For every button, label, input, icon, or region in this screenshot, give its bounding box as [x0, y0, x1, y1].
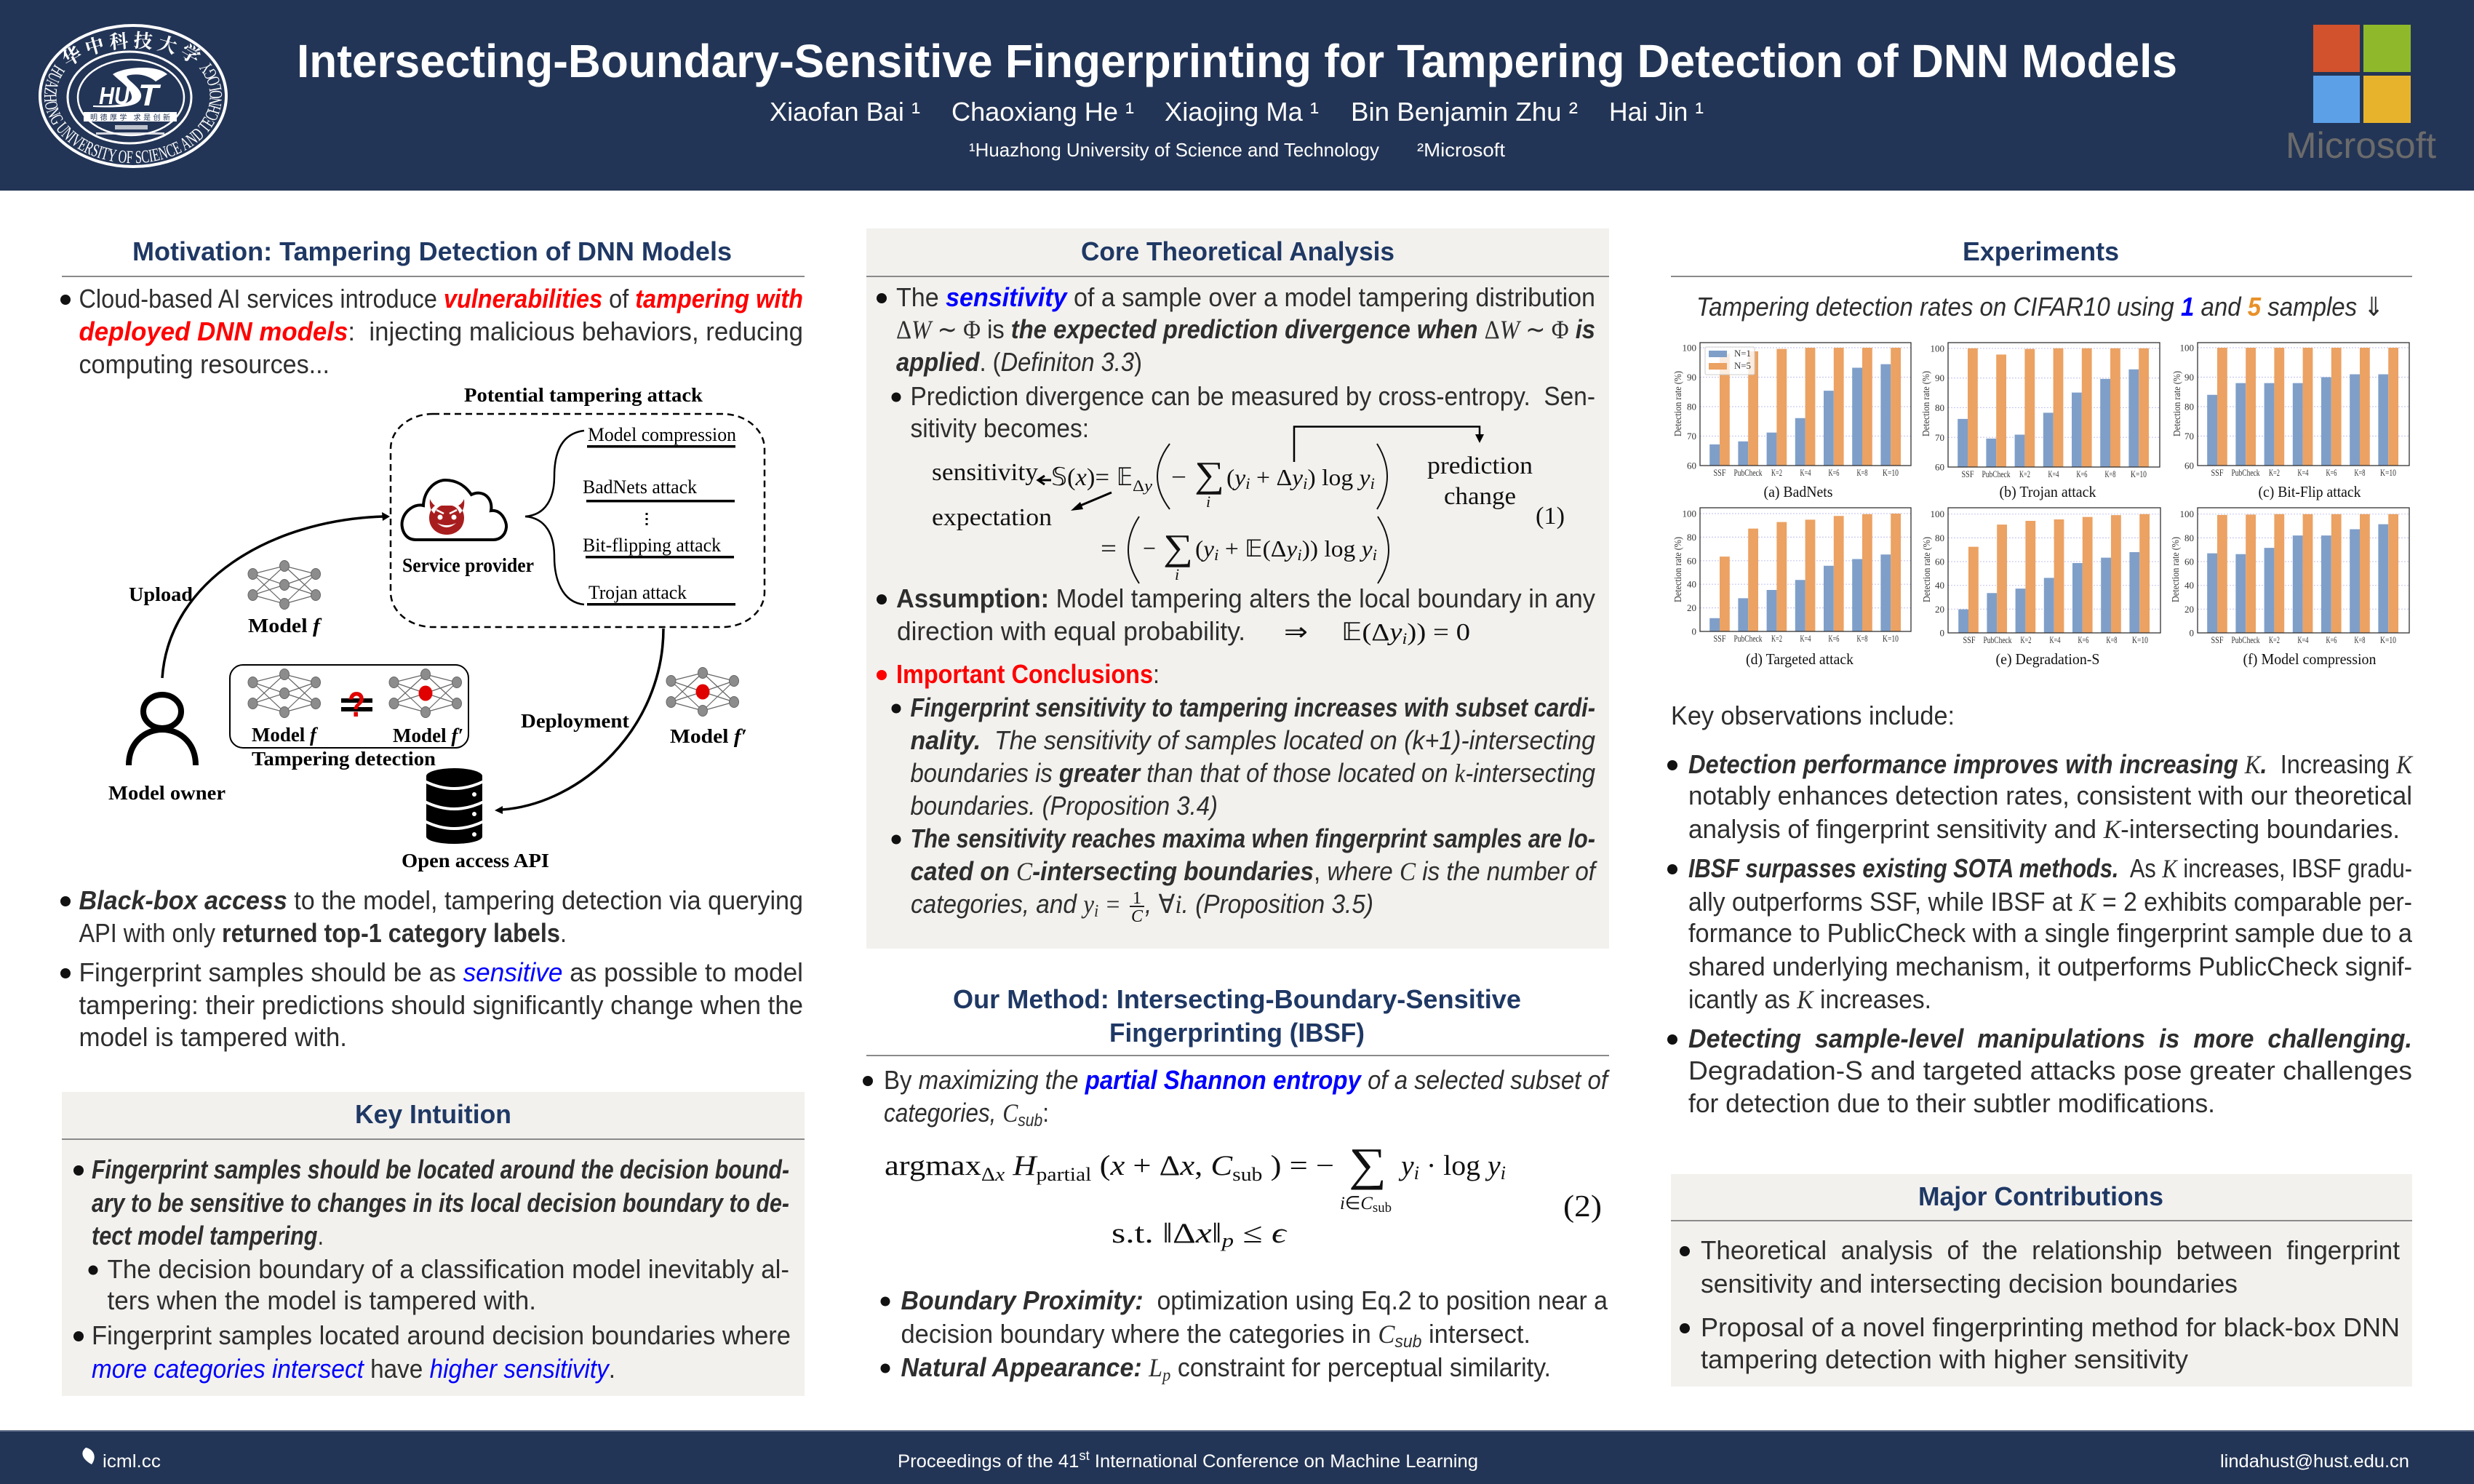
- equation 1: i: [1245, 474, 1250, 492]
- header banner: [0, 0, 2474, 191]
- icon: not equal question: ?: [348, 686, 365, 725]
- text block: key observations: ally outperforms SSF, while IBSF at K = 2 exhibits comparable per-: [1688, 887, 2412, 917]
- equation 1: i: [1214, 546, 1218, 564]
- bar chart: Model compression: [2171, 508, 2409, 668]
- equation 1: 𝔼: [1117, 464, 1133, 491]
- heading: our method: Fingerprinting (IBSF): [1109, 1018, 1365, 1048]
- text block: method details: Natural Appearance: L: [901, 1352, 1163, 1382]
- footer: email: lindahust@hust.edu.cn: [2220, 1451, 2409, 1472]
- equation 1: i: [1370, 474, 1375, 492]
- equation 1: −: [1171, 464, 1186, 491]
- icon: university logo: HU: [99, 82, 130, 109]
- bar chart: Degradation-S: 100: [1931, 508, 1944, 519]
- text block: key observations: analysis of fingerprint sensitivity and K-intersecting boundaries.: [1688, 814, 2400, 844]
- bar chart: Trojan attack: 60: [1935, 461, 1944, 473]
- equation 1: i: [1206, 492, 1210, 511]
- icon: tampered network f': [666, 668, 739, 716]
- equation 2: argmax: [885, 1150, 969, 1181]
- text block: contribution 1: Theoretical analysis of the relationship between fingerprint: [1701, 1235, 2400, 1265]
- bar chart: Model compression: 20: [2184, 604, 2194, 615]
- equation 1: −: [1143, 535, 1156, 562]
- diagram: tampering workflow: Tampering detection: [252, 748, 436, 770]
- authors: [770, 97, 1704, 127]
- text block: key observations: shared underlying mechanism, it outperforms PublicCheck signif-: [1688, 952, 2412, 981]
- bar chart: Targeted attack: 40: [1687, 579, 1696, 590]
- equation 1: y: [1284, 535, 1298, 562]
- equation 2: sub: [1232, 1164, 1262, 1185]
- bar chart: Targeted attack: K=6: [1829, 633, 1840, 644]
- bar chart: Degradation-S: 20: [1935, 604, 1944, 615]
- equation 2: [885, 1138, 1602, 1251]
- legend: [1705, 347, 1755, 375]
- bar chart: Degradation-S: K=10: [2132, 634, 2148, 645]
- text block: black-box access: API with only returned top-1 category labels.: [79, 918, 567, 948]
- text block: partial entropy: categories, C: [884, 1098, 1020, 1128]
- bar chart: Degradation-S: 0: [1939, 627, 1944, 639]
- equation 1: expectation: [932, 504, 1052, 531]
- bar chart: Bit-Flip attack: K=10: [2380, 467, 2396, 478]
- bar chart: Targeted attack: (d) Targeted attack: [1746, 650, 1853, 668]
- equation 1: + 𝔼(Δ: [1218, 535, 1286, 562]
- panel: core theoretical analysis: [866, 228, 1609, 949]
- equation 2: ≤: [1234, 1218, 1272, 1249]
- icon: cloud with devil: [402, 480, 506, 540]
- text block: method details: [880, 1285, 1608, 1385]
- icon: Microsoft logo: [2286, 25, 2436, 166]
- equation 2: i∈C: [1340, 1194, 1373, 1213]
- equation 2: s.t. ‖Δ x‖: [1112, 1218, 1220, 1249]
- bar chart: Trojan attack: 70: [1935, 432, 1944, 443]
- bar chart: Degradation-S: 60: [1935, 556, 1944, 567]
- bar chart: Degradation-S: K=8: [2107, 634, 2117, 645]
- text block: intersecting boundaries: Fingerprint samples located around decision boundaries where: [92, 1320, 791, 1350]
- tampering detection box: [230, 665, 468, 748]
- text block: assumption: 𝔼(Δy: [1341, 619, 1400, 646]
- bar chart: Bit-Flip attack: SSF: [2211, 467, 2223, 478]
- text block: important conclusions: C: [1131, 907, 1144, 926]
- chart subtitle: Tampering detection rates on CIFAR10 using 1 and 5 samples ⇓: [1696, 292, 2384, 322]
- icon: tampered network f' in box: [389, 669, 461, 717]
- text block: sensitive samples: [60, 957, 803, 1052]
- bar chart: Targeted attack: 80: [1687, 532, 1696, 543]
- text block: important conclusions: boundaries. (Proposition 3.4): [911, 791, 1218, 821]
- icon: network f: [248, 560, 320, 610]
- authors: Bin Benjamin Zhu ²: [1351, 97, 1578, 127]
- icon: Microsoft logo: Microsoft: [2286, 125, 2436, 166]
- bar chart: Trojan attack: K=6: [2076, 468, 2088, 479]
- text block: key observations: Detecting sample-level manipulations is more challenging.: [1688, 1024, 2412, 1053]
- text block: cloud services: Cloud-based AI services introduce vulnerabilities of tampering with: [79, 284, 803, 314]
- bar chart: Trojan attack: [1921, 343, 2160, 500]
- text block: key observations: Degradation-S and targeted attacks pose greater challenges: [1688, 1056, 2412, 1085]
- legend: N=5: [1734, 360, 1751, 371]
- equation 1: y: [1357, 464, 1370, 490]
- bar chart: BadNets: K=4: [1800, 467, 1811, 478]
- text block: sensitivity definition: ΔW ∼ Φ is the expected prediction divergence when ΔW ∼ Φ is: [896, 314, 1595, 344]
- equation 1: (y: [1195, 535, 1213, 562]
- footer: proceedings: Proceedings of the 41: [898, 1451, 1074, 1472]
- text block: assumption: direction with equal probability.: [897, 616, 1245, 646]
- equation 2: · log: [1419, 1150, 1488, 1181]
- bar chart: Degradation-S: 80: [1935, 532, 1944, 543]
- bar chart: Model compression: 0: [2190, 627, 2194, 639]
- bar chart: Degradation-S: Detection rate (%): [1922, 537, 1933, 602]
- bar chart: Trojan attack: (b) Trojan attack: [1999, 483, 2096, 500]
- equation 1: )) log: [1302, 535, 1362, 562]
- text block: key observations: formance to PublicCheck with a single fingerprint sample due to a: [1688, 918, 2413, 948]
- panel: our method: [863, 984, 1611, 1385]
- equation 2: partial: [1037, 1164, 1091, 1185]
- bar chart: Trojan attack: PubCheck: [1982, 468, 2011, 479]
- equation 1: ) log: [1308, 464, 1360, 490]
- bar chart: Model compression: SSF: [2211, 634, 2223, 645]
- bar chart: Degradation-S: SSF: [1963, 634, 1976, 645]
- diagram: tampering workflow: Open access API: [402, 850, 549, 871]
- affiliations: ²Microsoft: [1417, 139, 1506, 161]
- heading: our method: Our Method: Intersecting-Boundary-Sensitive: [953, 984, 1521, 1014]
- bar chart: Bit-Flip attack: [2172, 342, 2409, 500]
- text block: important conclusions: =: [1098, 890, 1121, 919]
- bar chart: Model compression: (f) Model compression: [2243, 650, 2377, 668]
- bar chart: Model compression: K=2: [2269, 634, 2280, 645]
- bar chart: BadNets: 60: [1687, 460, 1696, 471]
- panel: major contributions: [1671, 1174, 2412, 1387]
- bar chart: Targeted attack: 0: [1692, 626, 1696, 637]
- equation 1: (1): [1536, 503, 1565, 530]
- equation 2: Δ: [981, 1164, 995, 1185]
- equation 2: ) = −: [1262, 1150, 1334, 1181]
- bar chart: Degradation-S: K=2: [2021, 634, 2031, 645]
- text block: key observations: [1667, 701, 2414, 1118]
- text block: important conclusions: boundaries is greater than that of those located on k-intersecting: [911, 758, 1595, 788]
- text block: assumption: i: [1402, 629, 1407, 647]
- diagram: tampering workflow: Model compression: [588, 424, 736, 445]
- text block: partial entropy: By maximizing the partial Shannon entropy of a selected subset of: [884, 1065, 1611, 1095]
- text block: important conclusions: Fingerprint sensitivity to tampering increases with subset cardi-: [911, 693, 1595, 722]
- title: Intersecting-Boundary-Sensitive Fingerprinting for Tampering Detection of DNN Models: [297, 35, 2177, 87]
- text block: method details: decision boundary where the categories in C: [901, 1319, 1395, 1349]
- text block: fingerprint location: ary to be sensitive to changes in its local decision boundary to de-: [92, 1188, 789, 1218]
- icon: university logo: 明德厚学 求是创新: [90, 111, 170, 122]
- bar chart: Targeted attack: 100: [1682, 508, 1696, 519]
- footer: website: icml.cc: [103, 1451, 161, 1472]
- authors: Xiaofan Bai ¹: [770, 97, 920, 127]
- bar chart: BadNets: [1673, 342, 1911, 500]
- bar chart: Targeted attack: 60: [1687, 555, 1696, 566]
- text block: fingerprint location: The decision boundary of a classification model inevitably al-: [108, 1254, 789, 1284]
- equation 1: (y: [1226, 464, 1245, 490]
- text block: contribution 1: sensitivity and intersecting decision boundaries: [1701, 1269, 2238, 1298]
- bar chart: Trojan attack: Detection rate (%): [1921, 371, 1932, 436]
- text block: important conclusions: 1: [1133, 889, 1141, 908]
- bar chart: Targeted attack: PubCheck: [1734, 633, 1763, 644]
- bar chart: Bit-Flip attack: 70: [2184, 431, 2194, 442]
- bar chart: Bit-Flip attack: PubCheck: [2232, 467, 2260, 478]
- bar chart: BadNets: (a) BadNets: [1763, 483, 1833, 500]
- bar chart: Bit-Flip attack: 90: [2184, 372, 2194, 383]
- equation 2: (2): [1563, 1190, 1602, 1224]
- text block: sensitivity definition: applied. (Definiton 3.3): [896, 347, 1142, 377]
- bar chart: Targeted attack: Detection rate (%): [1673, 537, 1684, 602]
- icon: university logo: 华中科技大学: [63, 31, 201, 64]
- bar chart: Targeted attack: SSF: [1714, 633, 1725, 644]
- legend: N=1: [1734, 348, 1751, 359]
- tampering detection box: Model f: [252, 724, 319, 746]
- text block: key observations: for detection due to their subtler modifications.: [1688, 1088, 2215, 1118]
- panel: experiments: [1667, 236, 2414, 1118]
- bar chart: Model compression: 80: [2184, 532, 2194, 543]
- bar chart: Bit-Flip attack: K=8: [2354, 467, 2366, 478]
- text block: sensitive samples: model is tampered with.: [79, 1022, 347, 1052]
- tampering detection box: Model f′: [393, 725, 463, 746]
- equation 1: i: [1373, 546, 1377, 564]
- bar chart: BadNets: 100: [1682, 342, 1696, 354]
- authors: Chaoxiang He ¹: [951, 97, 1134, 127]
- text block: key observations: IBSF surpasses existing SOTA methods. As K increases, IBSF gradu-: [1688, 853, 2412, 883]
- text block: important conclusions: The sensitivity reaches maxima when fingerprint samples are lo-: [911, 823, 1595, 853]
- bar chart: Model compression: K=8: [2354, 634, 2366, 645]
- bar chart: BadNets: 70: [1687, 431, 1696, 442]
- text block: important conclusions: [877, 659, 1598, 926]
- panel: motivation: [60, 236, 805, 1052]
- text block: partial entropy: :: [1042, 1098, 1049, 1128]
- icon: database: [425, 768, 484, 844]
- text block: sensitivity definition: The sensitivity of a sample over a model tampering distribution: [896, 282, 1595, 312]
- diagram: tampering workflow: Upload: [129, 583, 193, 605]
- bar chart: Bit-Flip attack: 100: [2179, 342, 2194, 354]
- text block: partial entropy: sub: [1018, 1111, 1042, 1130]
- bar chart: Bit-Flip attack: 60: [2184, 460, 2194, 471]
- equation 2: H: [1012, 1150, 1038, 1181]
- bar chart: Bit-Flip attack: Detection rate (%): [2172, 371, 2183, 436]
- equation 2: i: [1414, 1162, 1419, 1184]
- bar chart: Trojan attack: K=2: [2019, 468, 2030, 479]
- bar chart: Degradation-S: (e) Degradation-S: [1996, 650, 2099, 668]
- bar chart: Model compression: 60: [2184, 556, 2194, 567]
- equation 1: i: [1175, 565, 1179, 583]
- bar chart: Trojan attack: SSF: [1961, 468, 1974, 479]
- authors: Xiaojing Ma ¹: [1165, 97, 1319, 127]
- bar chart: BadNets: PubCheck: [1734, 467, 1763, 478]
- icon: not equal question: [341, 686, 372, 725]
- text block: fingerprint location: tect model tampering.: [92, 1221, 324, 1250]
- text block: important conclusions: Important Conclusions:: [896, 659, 1160, 689]
- bar chart: Degradation-S: PubCheck: [1983, 634, 2012, 645]
- bar chart: BadNets: 80: [1687, 402, 1696, 412]
- text block: method details: intersect.: [1421, 1319, 1531, 1349]
- text block: key observations: Key observations include:: [1671, 701, 1955, 730]
- bar chart: Bit-Flip attack: 80: [2184, 402, 2194, 412]
- text block: assumption: [877, 583, 1595, 647]
- footer: proceedings: st: [1079, 1448, 1090, 1463]
- affiliations: ¹Huazhong University of Science and Technology: [969, 139, 1379, 161]
- diagram: tampering workflow: Model f: [248, 615, 322, 637]
- text block: method details: p: [1161, 1366, 1170, 1385]
- heading: key intuition: Key Intuition: [355, 1099, 511, 1129]
- text block: key observations: Detection performance improves with increasing K. Increasing K: [1688, 749, 2414, 779]
- text block: key observations: notably enhances detection rates, consistent with our theoretical: [1688, 781, 2412, 810]
- equation 1: i: [1303, 474, 1308, 492]
- diagram: tampering workflow: Service provider: [402, 554, 534, 576]
- text block: method details: sub: [1394, 1332, 1421, 1352]
- equation 1: y: [1290, 464, 1304, 490]
- bar chart: Targeted attack: [1673, 508, 1911, 668]
- authors: Hai Jin ¹: [1609, 97, 1704, 127]
- text block: contribution 2: Proposal of a novel fingerprinting method for black-box DNN: [1701, 1312, 2400, 1342]
- icon: university logo: T: [138, 78, 161, 112]
- bar chart: Trojan attack: K=4: [2048, 468, 2059, 479]
- bar chart: BadNets: K=8: [1856, 467, 1868, 478]
- bar chart: Targeted attack: K=10: [1883, 633, 1899, 644]
- text block: assumption: )) = 0: [1407, 619, 1470, 646]
- equation 2: sub: [1373, 1200, 1392, 1216]
- text block: intersecting boundaries: [73, 1320, 791, 1384]
- text block: sensitive samples: tampering: their predictions should significantly change when the: [79, 990, 803, 1020]
- bar chart: Trojan attack: 100: [1931, 343, 1944, 354]
- bar chart: Degradation-S: K=4: [2050, 634, 2061, 645]
- bar chart: BadNets: K=10: [1883, 467, 1899, 478]
- bar chart: BadNets: 90: [1687, 372, 1696, 383]
- heading: experiments: Experiments: [1963, 236, 2119, 266]
- text block: intersecting boundaries: more categories intersect have higher sensitivity.: [92, 1354, 615, 1384]
- text block: important conclusions: , ∀i. (Proposition 3.5): [1145, 889, 1373, 919]
- arrow: deployment: [495, 629, 663, 814]
- text block: important conclusions: cated on C-intersecting boundaries, where C is the number of: [911, 856, 1598, 886]
- bar chart: Bit-Flip attack: K=2: [2269, 467, 2280, 478]
- equation 2: y: [1485, 1150, 1501, 1181]
- icon: ICML mark: [82, 1448, 95, 1464]
- bar chart: Model compression: K=4: [2297, 634, 2309, 645]
- footer: proceedings: International Conference on Machine Learning: [1090, 1451, 1478, 1472]
- text block: sensitivity definition: Prediction divergence can be measured by cross-entropy. Sen-: [911, 381, 1595, 411]
- text block: cloud services: [60, 284, 803, 379]
- equation 1: i: [1297, 546, 1302, 564]
- bar chart: Trojan attack: 90: [1935, 372, 1944, 383]
- bar chart: Targeted attack: K=2: [1771, 633, 1782, 644]
- icon: university logo: HUAZHONG UNIVERSITY OF SCIENCE AND TECHNOLOGY: [44, 63, 223, 163]
- equation 1: + Δ: [1250, 464, 1292, 490]
- text block: cloud services: computing resources...: [79, 349, 330, 379]
- equation 1: sensitivity: [932, 459, 1038, 486]
- text block: sensitivity definition: sitivity becomes:: [911, 413, 1089, 443]
- text block: black-box access: [60, 885, 803, 948]
- equation 2: i: [1501, 1162, 1506, 1184]
- bar chart: Targeted attack: K=4: [1800, 633, 1811, 644]
- text block: fingerprint location: ters when the model is tampered with.: [108, 1285, 536, 1315]
- text block: contribution 2: [1680, 1312, 2400, 1374]
- equation 1: prediction: [1427, 452, 1533, 479]
- text block: important conclusions: nality. The sensitivity of samples located on (k+1)-intersecting: [911, 725, 1595, 755]
- diagram: tampering workflow: [108, 384, 765, 871]
- bar chart: BadNets: K=6: [1829, 467, 1840, 478]
- bar chart: Model compression: K=10: [2380, 634, 2396, 645]
- equation 2: x: [994, 1164, 1005, 1185]
- arrow: upload: [162, 512, 390, 678]
- text block: fingerprint location: [73, 1154, 789, 1315]
- bar chart: Model compression: PubCheck: [2232, 634, 2260, 645]
- diagram: tampering workflow: Trojan attack: [588, 582, 687, 603]
- bar chart: Model compression: 100: [2179, 508, 2194, 519]
- text block: important conclusions: categories, and y: [911, 889, 1095, 919]
- bar chart: Trojan attack: K=8: [2105, 468, 2115, 479]
- diagram: tampering workflow: Model owner: [108, 782, 226, 804]
- equation 2: y: [1398, 1150, 1414, 1181]
- heading: motivation: Motivation: Tampering Detection of DNN Models: [132, 236, 732, 266]
- diagram: tampering workflow: Model f′: [670, 725, 747, 747]
- equation 1: ∑: [1194, 454, 1224, 495]
- bar chart: Model compression: K=6: [2326, 634, 2337, 645]
- bar chart: Trojan attack: 80: [1935, 402, 1944, 413]
- text block: assumption: Assumption: Model tampering alters the local boundary in any: [896, 583, 1595, 613]
- equation 1: =: [1101, 535, 1117, 562]
- text block: assumption: ⇒: [1284, 619, 1308, 646]
- bar chart: Model compression: 40: [2184, 580, 2194, 591]
- text block: black-box access: Black-box access to the model, tampering detection via querying: [79, 885, 803, 915]
- bar chart: Bit-Flip attack: K=4: [2297, 467, 2309, 478]
- text block: method details: constraint for perceptual similarity.: [1170, 1352, 1551, 1382]
- bar chart: Targeted attack: 20: [1687, 602, 1696, 613]
- diagram: tampering workflow: Deployment: [521, 710, 629, 732]
- text block: key observations: icantly as K increases.: [1688, 984, 1931, 1014]
- bar chart: Model compression: Detection rate (%): [2171, 537, 2182, 602]
- text block: fingerprint location: Fingerprint samples should be located around the decision bound-: [92, 1154, 789, 1184]
- footer bar: [0, 1430, 2474, 1484]
- text block: sensitive samples: Fingerprint samples should be as sensitive as possible to model: [79, 957, 803, 987]
- icon: model owner: [129, 695, 196, 765]
- heading: core theoretical analysis: Core Theoretical Analysis: [1081, 236, 1394, 266]
- equation 1: 𝕊(x)=: [1051, 464, 1109, 491]
- equation 2: x + Δx, C: [1110, 1150, 1229, 1181]
- equation 2: ∑: [1349, 1138, 1386, 1190]
- equation 2: p: [1220, 1230, 1234, 1251]
- text block: contribution 2: tampering detection with higher sensitivity: [1701, 1344, 2188, 1374]
- text block: method details: Boundary Proximity: optimization using Eq.2 to position near a: [901, 1285, 1608, 1315]
- bar chart: Bit-Flip attack: (c) Bit-Flip attack: [2258, 483, 2361, 500]
- bar chart: BadNets: Detection rate (%): [1673, 371, 1684, 436]
- equation 1: change: [1444, 483, 1516, 510]
- diagram: tampering workflow: BadNets attack: [583, 476, 697, 498]
- text block: cloud services: deployed DNN models: injecting malicious behaviors, reducing: [79, 316, 803, 346]
- diagram: tampering workflow: Bit-flipping attack: [583, 535, 721, 556]
- bar chart: Bit-Flip attack: K=6: [2326, 467, 2337, 478]
- text block: important conclusions: i: [1094, 902, 1098, 921]
- equation 2: ϵ: [1272, 1218, 1288, 1249]
- panel: key intuition: [62, 1092, 805, 1396]
- equation 1: y: [1360, 535, 1373, 562]
- equation 1: Δy: [1133, 476, 1152, 495]
- heading: major contributions: Major Contributions: [1918, 1181, 2163, 1211]
- bar chart: Degradation-S: [1922, 508, 2160, 668]
- bar chart: Trojan attack: K=10: [2131, 468, 2147, 479]
- equation 2: (: [1091, 1150, 1110, 1181]
- equation 1: ∑: [1163, 527, 1193, 567]
- icon: network f in box: [248, 669, 320, 717]
- diagram: tampering workflow: Potential tampering attack: [464, 384, 703, 406]
- text block: contribution 1: [1680, 1235, 2400, 1298]
- bar chart: BadNets: K=2: [1771, 467, 1782, 478]
- equation 1: [932, 426, 1565, 583]
- text block: sensitivity definition: [877, 282, 1595, 443]
- heading: our method: [953, 984, 1521, 1048]
- bar chart: BadNets: SSF: [1714, 467, 1725, 478]
- text block: partial entropy: [863, 1065, 1611, 1130]
- bar chart: Degradation-S: K=6: [2078, 634, 2089, 645]
- bar chart: Degradation-S: 40: [1935, 580, 1944, 591]
- bar chart: Targeted attack: K=8: [1856, 633, 1868, 644]
